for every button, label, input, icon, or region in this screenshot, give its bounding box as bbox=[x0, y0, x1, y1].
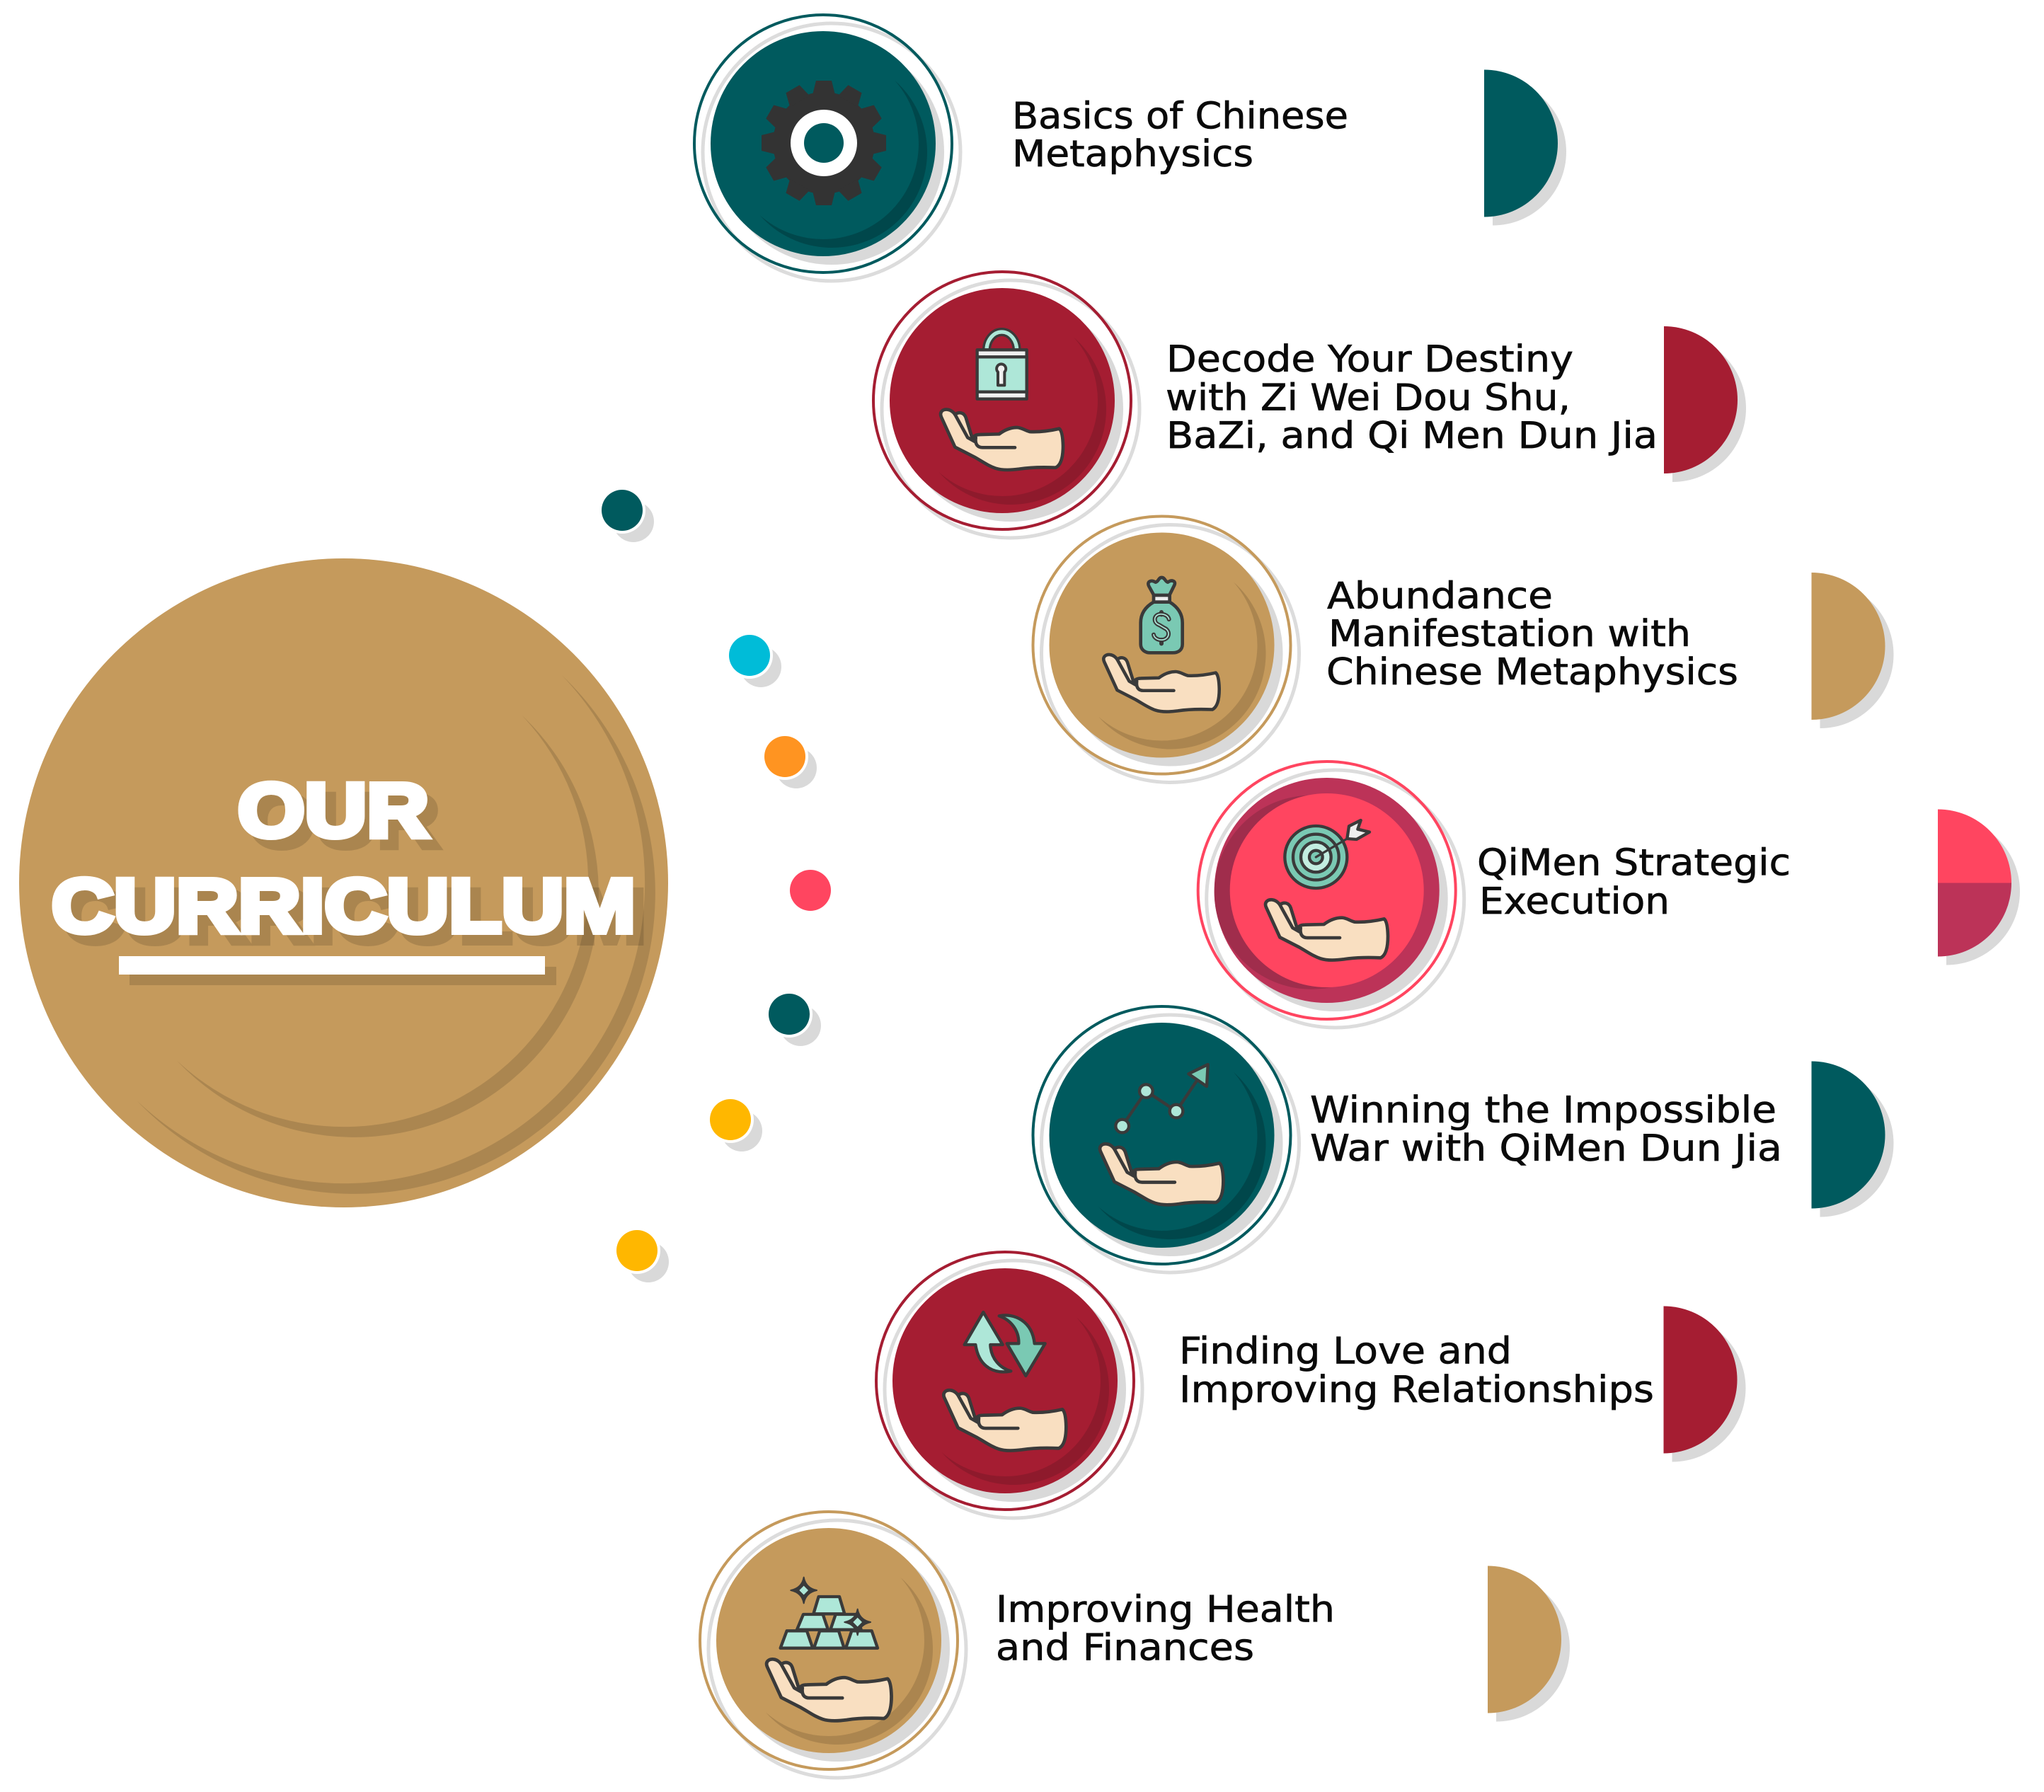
title shadow: CURRICULUM bbox=[62, 873, 646, 959]
panel: item 4 QiMen Strategic Execution bbox=[1198, 762, 2020, 1028]
badge circle bbox=[694, 15, 960, 281]
icon: cycle arrows bbox=[965, 1312, 1045, 1376]
icon: open hand bbox=[1265, 900, 1388, 960]
icon: gold bars bbox=[781, 1578, 878, 1648]
icon: money bag bbox=[1141, 578, 1183, 653]
half circle marker bbox=[1938, 810, 2020, 965]
badge circle bbox=[876, 1252, 1142, 1518]
label: War with QiMen Dun Jia bbox=[1310, 1127, 1782, 1170]
panel: item 7 Improving Health and Finances bbox=[700, 1512, 1570, 1778]
panel: item 6 Finding Love bbox=[876, 1252, 1745, 1518]
badge circle bbox=[873, 272, 1139, 538]
label: Abundance bbox=[1327, 575, 1553, 617]
half circle marker bbox=[1664, 326, 1746, 482]
dot: amber bottom bbox=[614, 1227, 669, 1282]
connector dots bbox=[599, 487, 831, 1282]
label: Chinese Metaphysics bbox=[1326, 651, 1738, 694]
half circle marker bbox=[1488, 1566, 1570, 1721]
title bbox=[52, 767, 636, 948]
icon: open hand bbox=[941, 410, 1063, 470]
panel: item 5 Winning the Impossible War bbox=[1033, 1006, 1894, 1273]
label: Improving Relationships bbox=[1179, 1369, 1654, 1411]
icon: open hand bbox=[1100, 1144, 1223, 1205]
title underline bbox=[119, 956, 545, 975]
dot: teal lower bbox=[766, 991, 821, 1046]
badge circle bbox=[1033, 517, 1299, 783]
label: Winning the Impossible bbox=[1310, 1089, 1776, 1132]
label: Decode Your Destiny bbox=[1166, 338, 1573, 381]
label bbox=[1179, 1331, 1654, 1411]
label bbox=[996, 1588, 1335, 1669]
label: and Finances bbox=[996, 1626, 1254, 1669]
panel: item 3 Abundance Manifestation bbox=[1033, 517, 1894, 783]
icon: padlock bbox=[977, 332, 1027, 399]
panel: item 1 Basics of Chinese Metaphysics bbox=[694, 15, 1566, 281]
label: Execution bbox=[1479, 880, 1670, 923]
dot: orange bbox=[762, 733, 817, 788]
dot: cyan bbox=[726, 632, 781, 687]
badge circle bbox=[1198, 762, 1464, 1028]
label: Metaphysics bbox=[1012, 133, 1253, 176]
label: BaZi, and Qi Men Dun Jia bbox=[1166, 415, 1658, 457]
label bbox=[1477, 842, 1791, 923]
label: with Zi Wei Dou Shu, bbox=[1166, 377, 1571, 419]
title shadow: OUR bbox=[248, 778, 440, 863]
label: Basics of Chinese bbox=[1012, 95, 1348, 137]
half circle marker bbox=[1484, 69, 1566, 225]
dot: amber bbox=[707, 1096, 762, 1151]
panel: item 2 Decode Your Destiny bbox=[873, 272, 1746, 538]
dot: teal top bbox=[599, 487, 654, 542]
label bbox=[1310, 1089, 1782, 1170]
icon: open hand bbox=[943, 1390, 1066, 1451]
panel: main circle with title bbox=[19, 558, 668, 1207]
title: OUR bbox=[238, 767, 429, 853]
label bbox=[1326, 575, 1738, 694]
title: CURRICULUM bbox=[52, 863, 636, 948]
label: Improving Health bbox=[996, 1588, 1335, 1631]
icon: target with arrow bbox=[1285, 820, 1370, 888]
label: Finding Love and bbox=[1179, 1331, 1512, 1373]
icon: gear bbox=[762, 81, 886, 205]
half circle marker bbox=[1812, 1062, 1894, 1217]
dot: pink bbox=[790, 870, 831, 911]
icon: open hand bbox=[1103, 655, 1219, 712]
half circle marker bbox=[1812, 573, 1894, 728]
label bbox=[1012, 95, 1348, 176]
icon: rising chart bbox=[1115, 1064, 1208, 1132]
label: QiMen Strategic bbox=[1477, 842, 1791, 885]
badge circle bbox=[700, 1512, 966, 1778]
label: Manifestation with bbox=[1328, 613, 1691, 655]
icon: open hand bbox=[766, 1659, 892, 1721]
crescent shading bbox=[137, 675, 655, 1194]
label bbox=[1166, 338, 1658, 457]
half circle marker bbox=[1663, 1306, 1745, 1462]
main circle disc bbox=[19, 558, 668, 1207]
title shadow bbox=[62, 778, 646, 985]
badge circle bbox=[1033, 1006, 1299, 1273]
